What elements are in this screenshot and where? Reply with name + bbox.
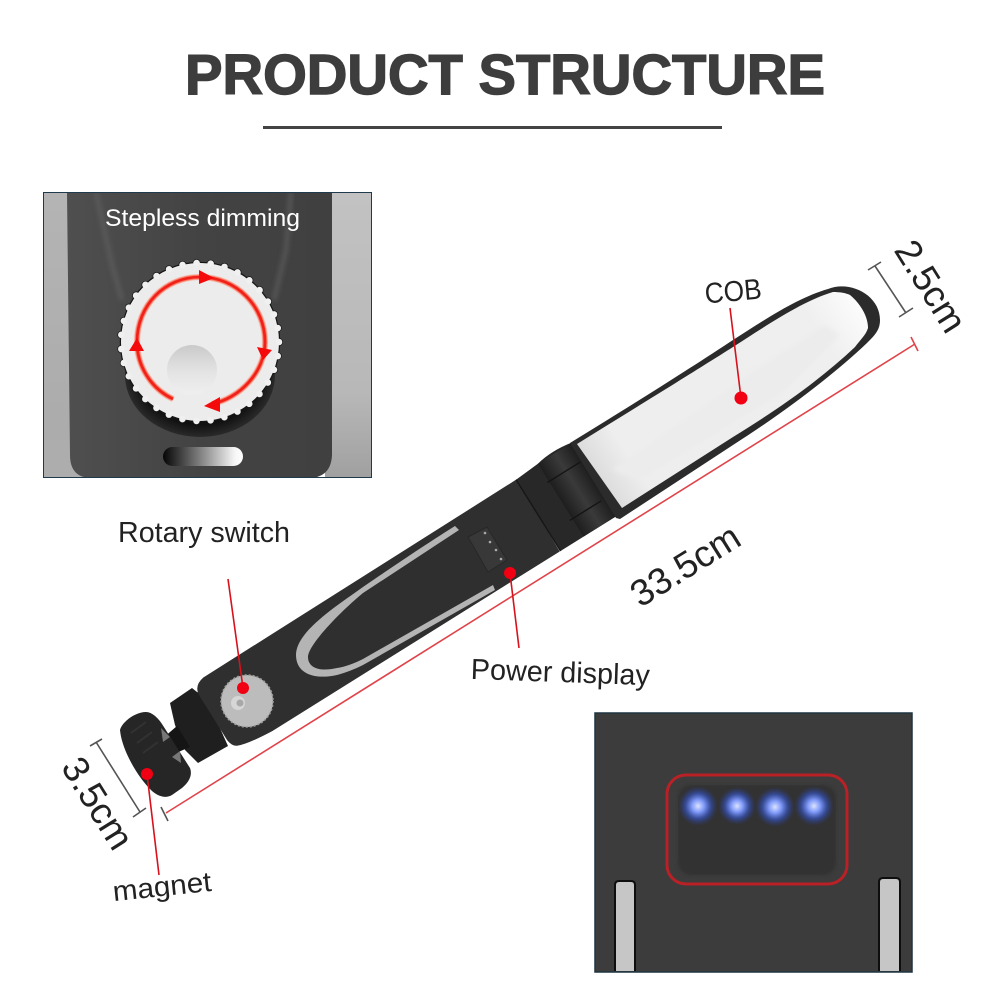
- magnet knob: [120, 712, 191, 797]
- callout: magnet: magnet: [111, 866, 213, 907]
- dimension: 33.5cm: 33.5cm: [623, 516, 748, 615]
- rotation arrow: [129, 270, 272, 412]
- callout: COB: [703, 274, 763, 404]
- dimming gradient slot: [163, 447, 243, 466]
- product: power display window: [468, 527, 507, 572]
- knob recess shadow: [125, 371, 275, 437]
- right inlay peg: [879, 878, 900, 971]
- title: PRODUCT STRUCTURE: [185, 43, 825, 107]
- label: stepless dimming: Stepless dimming: [105, 205, 300, 232]
- dimension: 2.5cm: 2.5cm: [886, 233, 975, 340]
- panel: power display detail: [595, 713, 912, 972]
- panel body: [67, 192, 332, 478]
- callout: power display: [470, 567, 651, 692]
- blue LEDs: [678, 786, 834, 827]
- ball joint block: [170, 688, 228, 763]
- callout: COB: COB: [703, 274, 763, 310]
- product: handle body: [189, 441, 617, 754]
- product: rotary switch: [221, 675, 273, 727]
- product: grey swoosh inlay: [296, 526, 495, 677]
- dimension: 33.5cm: [161, 337, 918, 821]
- callout: power display: Power display: [470, 654, 651, 692]
- callout: rotary switch: [118, 517, 290, 694]
- left inlay peg: [615, 881, 635, 971]
- dimension: 3.5cm: 3.5cm: [53, 750, 142, 857]
- callout: rotary switch: Rotary switch: [118, 517, 290, 549]
- indicator window: [678, 785, 836, 875]
- knob hole: [167, 345, 217, 372]
- red highlight frame: [667, 775, 847, 884]
- hinge: [514, 441, 617, 551]
- callout: magnet: [111, 768, 213, 907]
- rotary knob: [120, 262, 280, 422]
- panel border: [43, 192, 372, 478]
- stem: [163, 726, 190, 753]
- product: magnet base: [120, 688, 228, 797]
- product: COB lamp head: [570, 286, 880, 519]
- panel: stepless dimming detail: [43, 192, 372, 478]
